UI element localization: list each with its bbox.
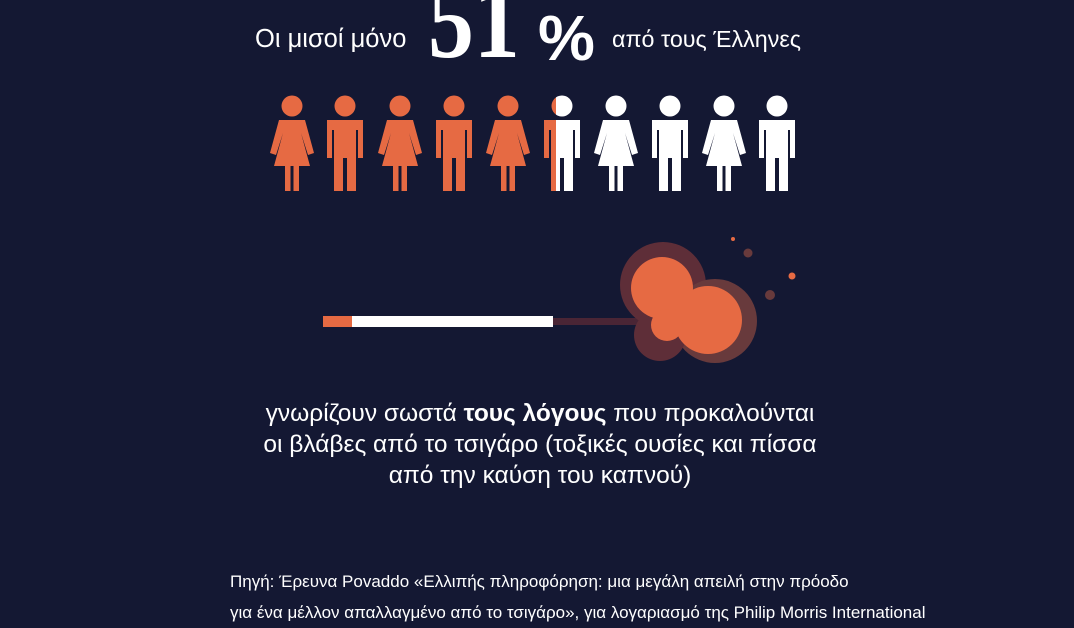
title text right: από τους Έλληνες bbox=[612, 26, 801, 52]
title text left: Οι μισοί μόνο bbox=[255, 25, 406, 53]
description text: από την καύση του καπνού) bbox=[389, 462, 691, 489]
icon: cigarette with smoke bbox=[323, 237, 796, 363]
source note bbox=[230, 572, 926, 622]
smoke cloud bbox=[620, 237, 796, 363]
orange figures bbox=[270, 96, 580, 191]
description text: γνωρίζουν σωστά τους λόγους που προκαλούνται bbox=[266, 400, 814, 427]
description text bbox=[263, 400, 817, 489]
description text: οι βλάβες από το τσιγάρο (τοξικές ουσίες και πίσσα bbox=[263, 431, 817, 458]
pictogram: people 51% bbox=[270, 96, 795, 191]
title bbox=[255, 0, 801, 81]
cigarette bbox=[323, 316, 643, 327]
source note: Πηγή: Έρευνα Povaddo «Ελλιπής πληροφόρηση: μια μεγάλη απειλή στην πρόοδο bbox=[230, 572, 849, 591]
source note: για ένα μέλλον απαλλαγμένο από το τσιγάρο», για λογαριασμό της Philip Morris International bbox=[230, 603, 926, 622]
white figures bbox=[544, 96, 795, 191]
percent sign: % bbox=[538, 2, 595, 74]
